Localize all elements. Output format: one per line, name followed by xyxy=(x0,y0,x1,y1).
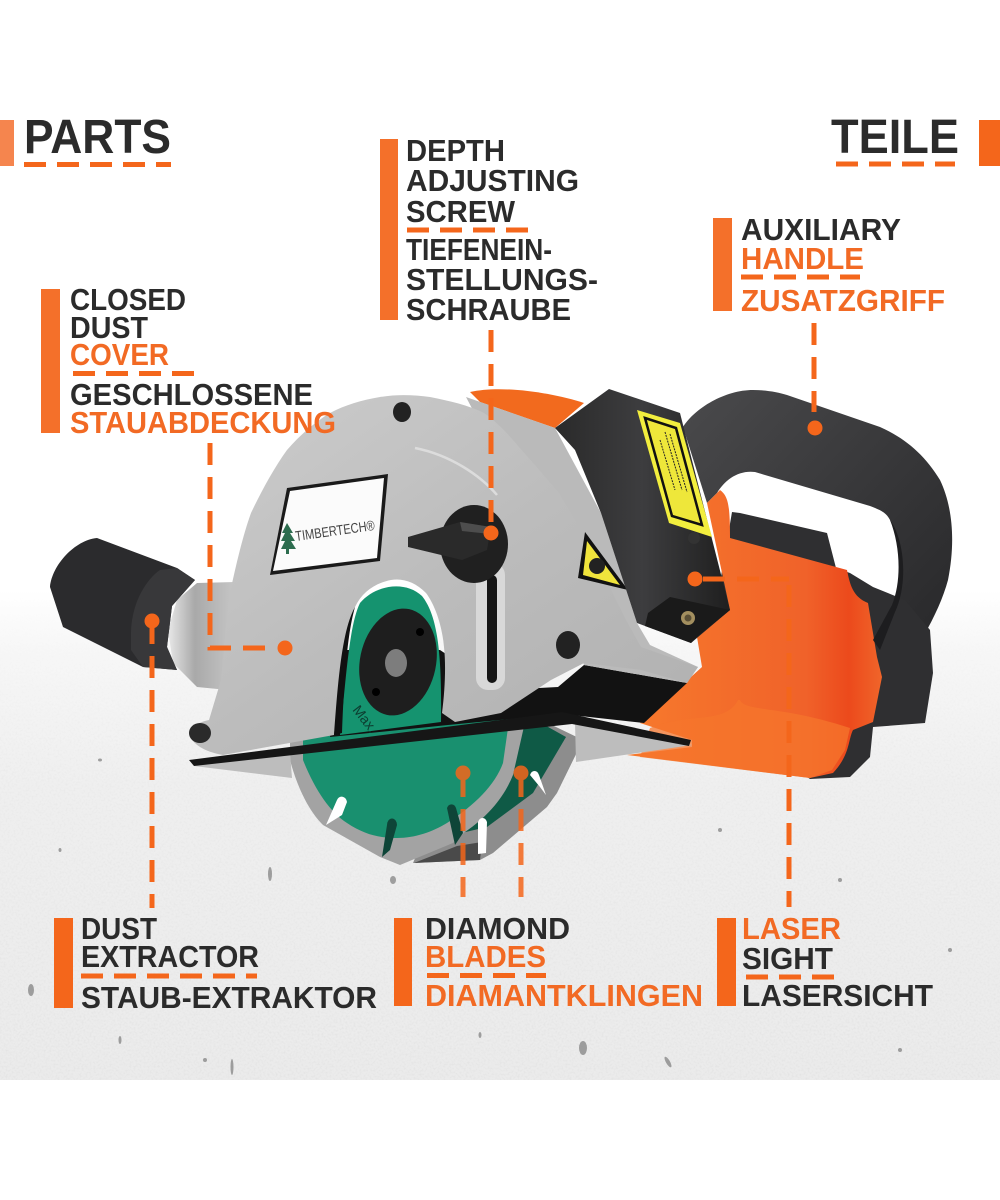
power tool: wall chaser xyxy=(50,389,952,900)
leader line: dust extractor xyxy=(144,614,160,908)
arch green blade and flange: Max. xyxy=(350,702,381,736)
label: dust extractor: DUST xyxy=(81,911,157,946)
label: depth adjusting screw: SCHRAUBE xyxy=(406,292,571,327)
label: closed dust cover: COVER xyxy=(70,337,169,372)
back diamond blade xyxy=(413,700,583,863)
label: closed dust cover: GESCHLOSSENE xyxy=(70,377,313,412)
icon: pine tree xyxy=(281,523,296,554)
label: closed dust cover: DUST xyxy=(70,310,148,345)
label: depth adjusting screw: TIEFENEIN- xyxy=(406,232,552,267)
label: closed dust cover: STAUABDECKUNG xyxy=(70,405,336,440)
label: depth adjusting screw: DEPTH xyxy=(406,133,505,168)
leader line: depth screw xyxy=(484,330,498,540)
heading: TEILE: TEILE xyxy=(831,111,959,164)
dust extractor tube xyxy=(168,582,235,690)
label: laser sight: SIGHT xyxy=(742,941,833,976)
label: diamond blades: DIAMANTKLINGEN xyxy=(425,978,703,1013)
label: depth adjusting screw: ADJUSTING xyxy=(406,163,579,198)
label: auxiliary handle: AUXILIARY xyxy=(741,212,901,247)
label: closed dust cover: CLOSED xyxy=(70,282,186,317)
yellow laser label xyxy=(637,410,712,537)
leader line: dust cover xyxy=(210,443,292,656)
label: auxiliary handle: ZUSATZGRIFF xyxy=(741,283,945,318)
label: dust extractor: EXTRACTOR xyxy=(81,939,259,974)
silver blade guard cover xyxy=(189,395,698,755)
leader lines: diamond blades xyxy=(456,766,528,897)
black underside of housing xyxy=(330,650,687,737)
label: dust extractor xyxy=(54,911,377,1015)
label: laser sight: LASER xyxy=(742,911,841,946)
label: auxiliary handle: HANDLE xyxy=(741,241,864,276)
auxiliary handle grip xyxy=(683,390,952,677)
label: closed dust cover xyxy=(41,282,336,440)
label: depth adjusting screw: STELLUNGS- xyxy=(406,262,598,297)
label: depth adjusting screw xyxy=(380,133,598,327)
rear motor housing dark xyxy=(700,512,933,779)
label: diamond blades xyxy=(394,911,703,1013)
label: depth adjusting screw: SCREW xyxy=(406,194,516,229)
label: laser sight xyxy=(717,911,933,1013)
black handle lower end xyxy=(873,520,903,650)
top mounting hole xyxy=(393,402,411,422)
orange motor housing xyxy=(627,490,882,778)
label: laser sight: LASERSICHT xyxy=(742,978,933,1013)
label: auxiliary handle xyxy=(713,212,945,318)
left screw xyxy=(189,723,211,743)
laser warning triangle xyxy=(578,532,628,590)
dust extractor knob xyxy=(50,538,195,670)
leader line: auxiliary handle xyxy=(808,323,822,436)
white brand label: TIMBERTECH® xyxy=(294,517,376,544)
label: diamond blades: BLADES xyxy=(425,939,546,974)
arch green blade and flange xyxy=(334,586,446,736)
base plate xyxy=(189,712,692,778)
label: dust extractor: STAUB-EXTRAKTOR xyxy=(81,980,377,1015)
heading: PARTS: PARTS xyxy=(24,111,171,164)
background: concrete floor xyxy=(0,590,1000,1080)
label: diamond blades: DIAMOND xyxy=(425,911,570,946)
depth slot xyxy=(476,563,505,690)
blurred shadow of laser line xyxy=(777,600,783,900)
front diamond blade xyxy=(290,700,546,865)
leader line: laser sight xyxy=(688,572,789,907)
laser sight box xyxy=(555,389,730,643)
side screw xyxy=(556,631,580,659)
orange top housing xyxy=(470,389,584,428)
silver side of guard xyxy=(466,397,698,683)
white brand label xyxy=(270,474,388,575)
depth adjusting knob xyxy=(408,505,508,583)
